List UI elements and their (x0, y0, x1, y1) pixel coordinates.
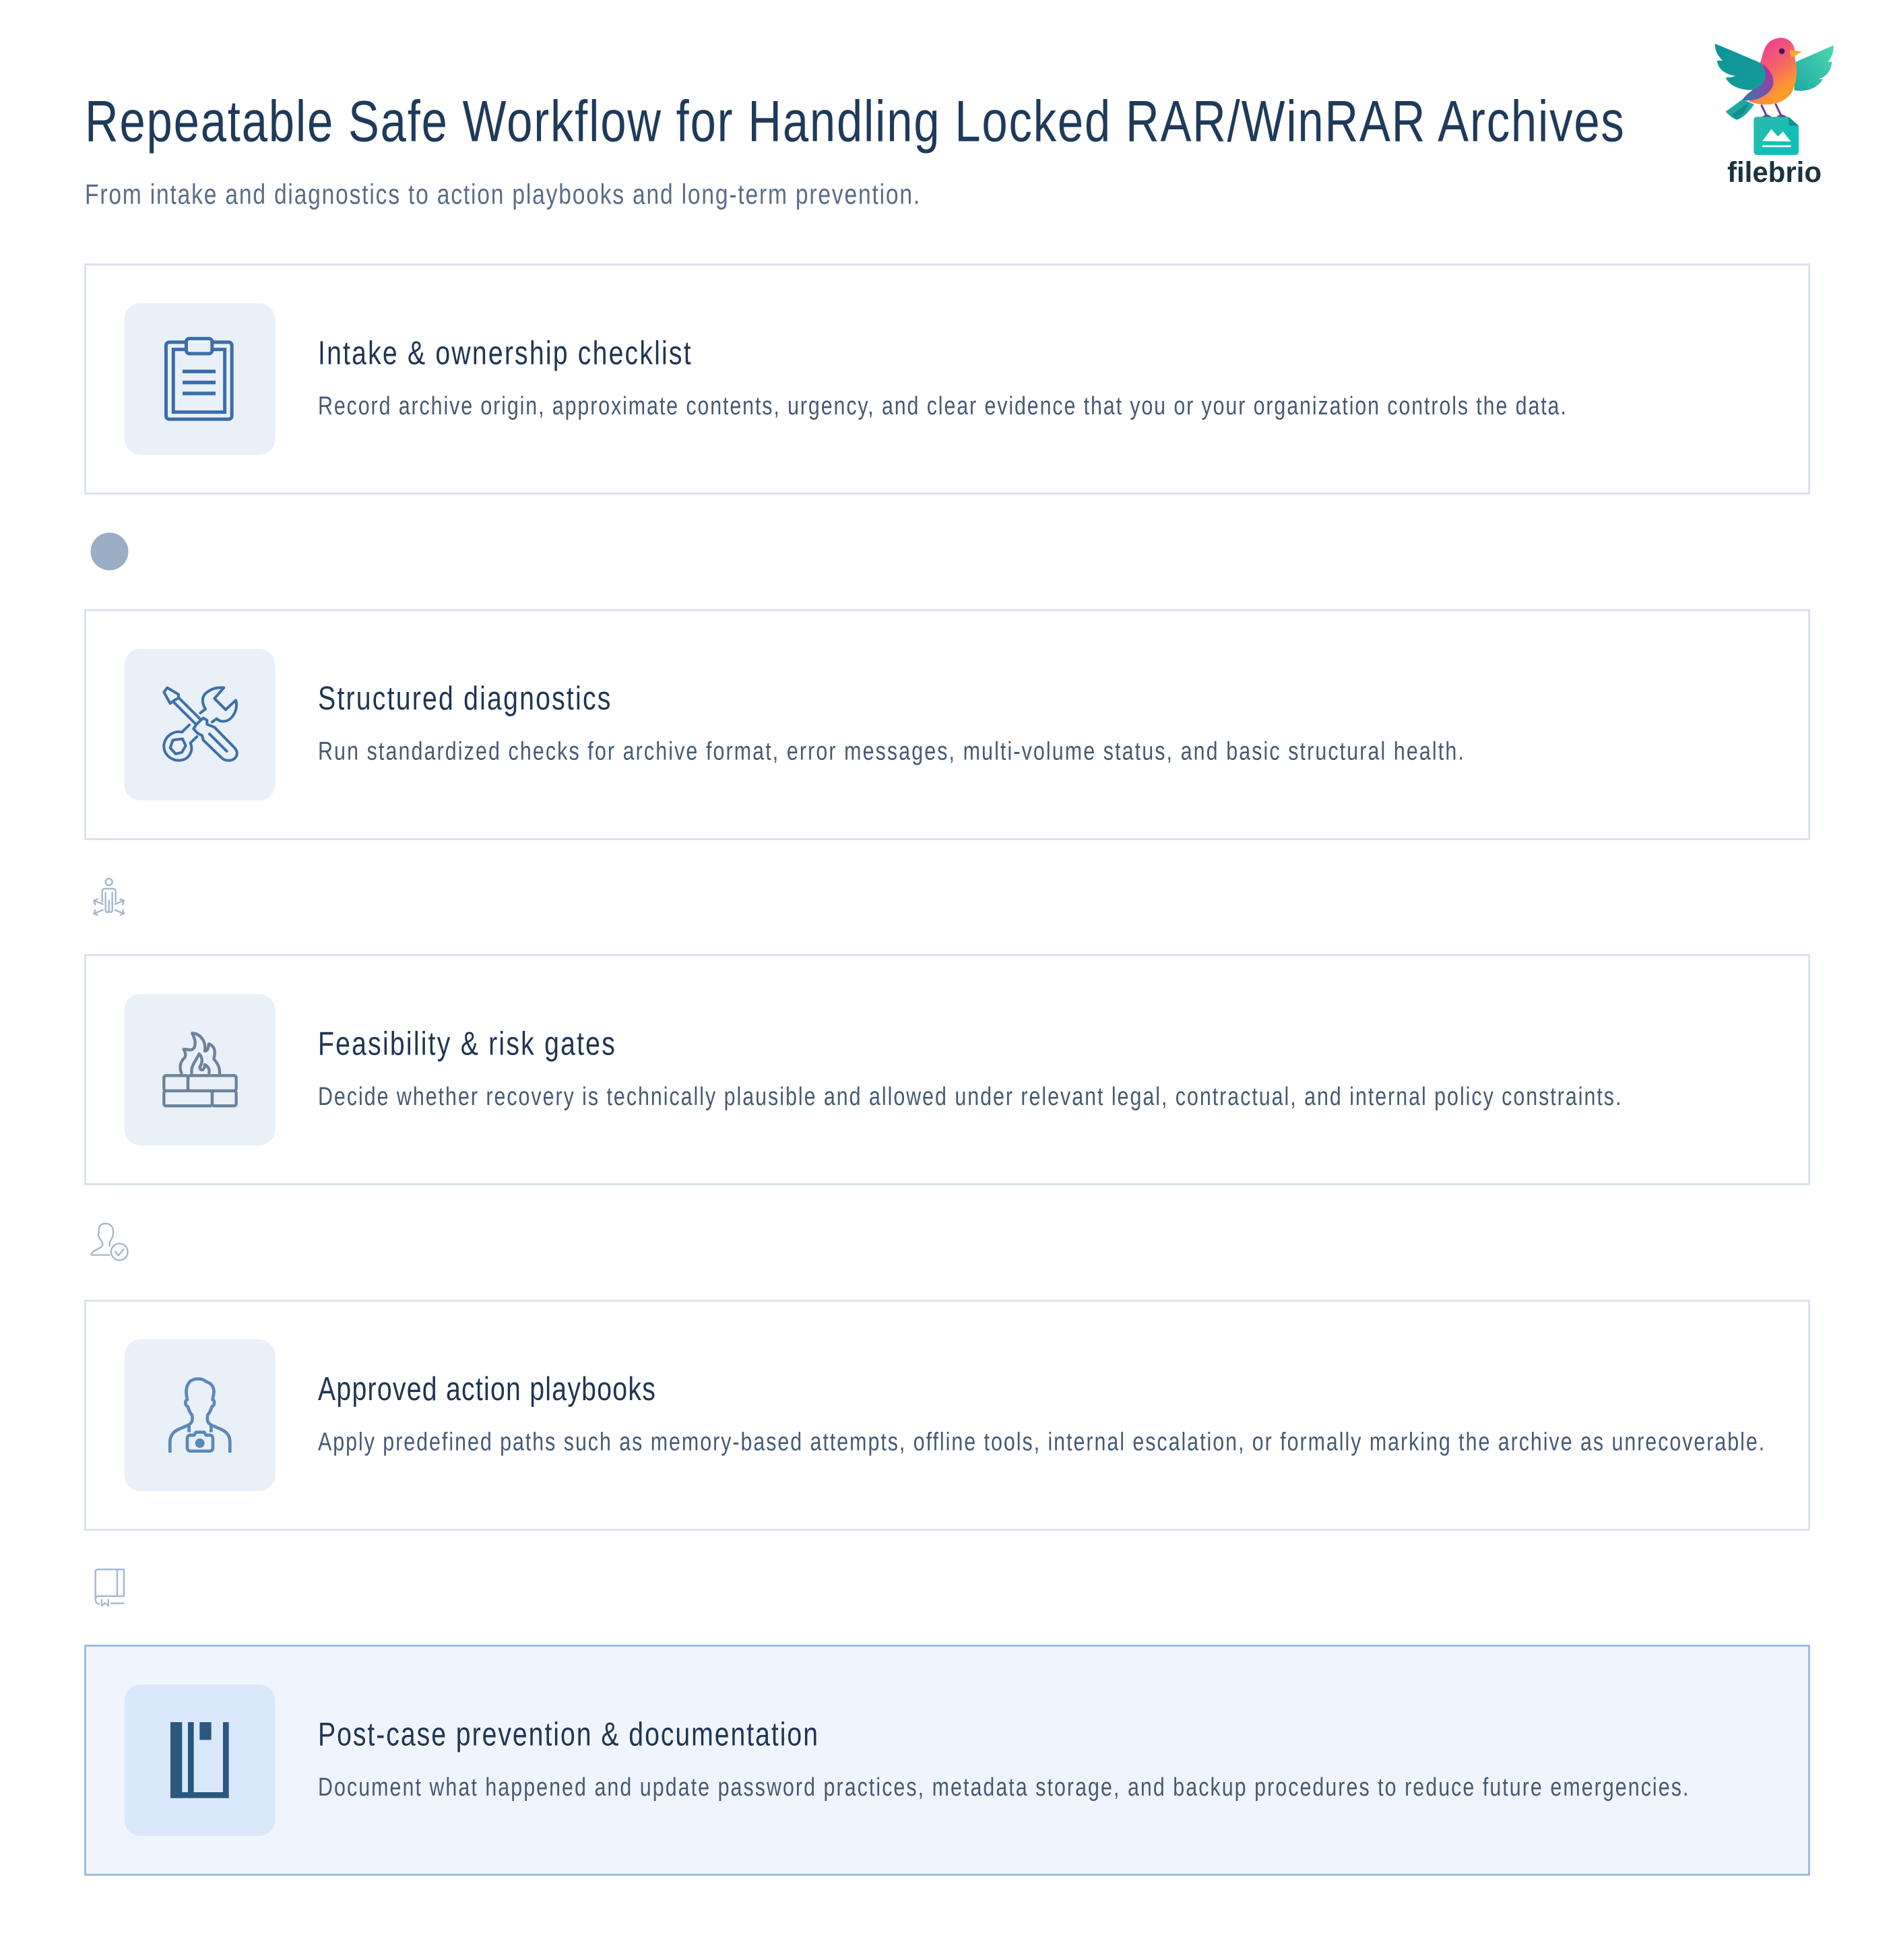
connector icon: person with arrows (94, 879, 124, 915)
title: Repeatable Safe Workflow for Handling Locked RAR/WinRAR Archives (85, 89, 1624, 154)
description: Apply predefined paths such as memory-based attempts, offline tools, internal escalation, or formally marking the archive as unrecoverable. (318, 1428, 1764, 1456)
connector icon: user with check (92, 1224, 128, 1260)
panel: feasibility and risk gates (85, 955, 1809, 1184)
panel: structured diagnostics (85, 610, 1809, 840)
connector icon: dot (90, 532, 128, 570)
description: Document what happened and update password practices, metadata storage, and backup procedures to reduce future emergencies. (318, 1773, 1688, 1802)
description: Run standardized checks for archive format, error messages, multi-volume status, and basic structural health. (318, 737, 1464, 765)
heading: Post-case prevention & documentation (318, 1716, 818, 1753)
panel: intake and ownership checklist (85, 264, 1809, 493)
description: Decide whether recovery is technically plausible and allowed under relevant legal, contractual, and internal policy constraints. (318, 1083, 1621, 1111)
logo: filebrio bird (1715, 38, 1834, 189)
heading: Intake & ownership checklist (318, 335, 691, 372)
description: Record archive origin, approximate contents, urgency, and clear evidence that you or your organization controls the data. (318, 392, 1566, 420)
icon tile: clipboard (124, 303, 275, 455)
heading: Approved action playbooks (318, 1371, 655, 1408)
connector icon: book (96, 1569, 125, 1606)
icon tile: person with camera (124, 1339, 275, 1491)
heading: Structured diagnostics (318, 681, 610, 717)
icon tile: wrench and screwdriver (124, 649, 275, 800)
icon tile: firewall (124, 994, 275, 1145)
heading: Feasibility & risk gates (318, 1025, 615, 1063)
panel: post-case prevention and documentation (85, 1645, 1809, 1874)
icon tile: bookshelf (124, 1684, 275, 1836)
logo wordmark: filebrio (1727, 156, 1822, 189)
panel: approved action playbooks (85, 1300, 1809, 1529)
subtitle: From intake and diagnostics to action playbooks and long-term prevention. (85, 179, 920, 210)
